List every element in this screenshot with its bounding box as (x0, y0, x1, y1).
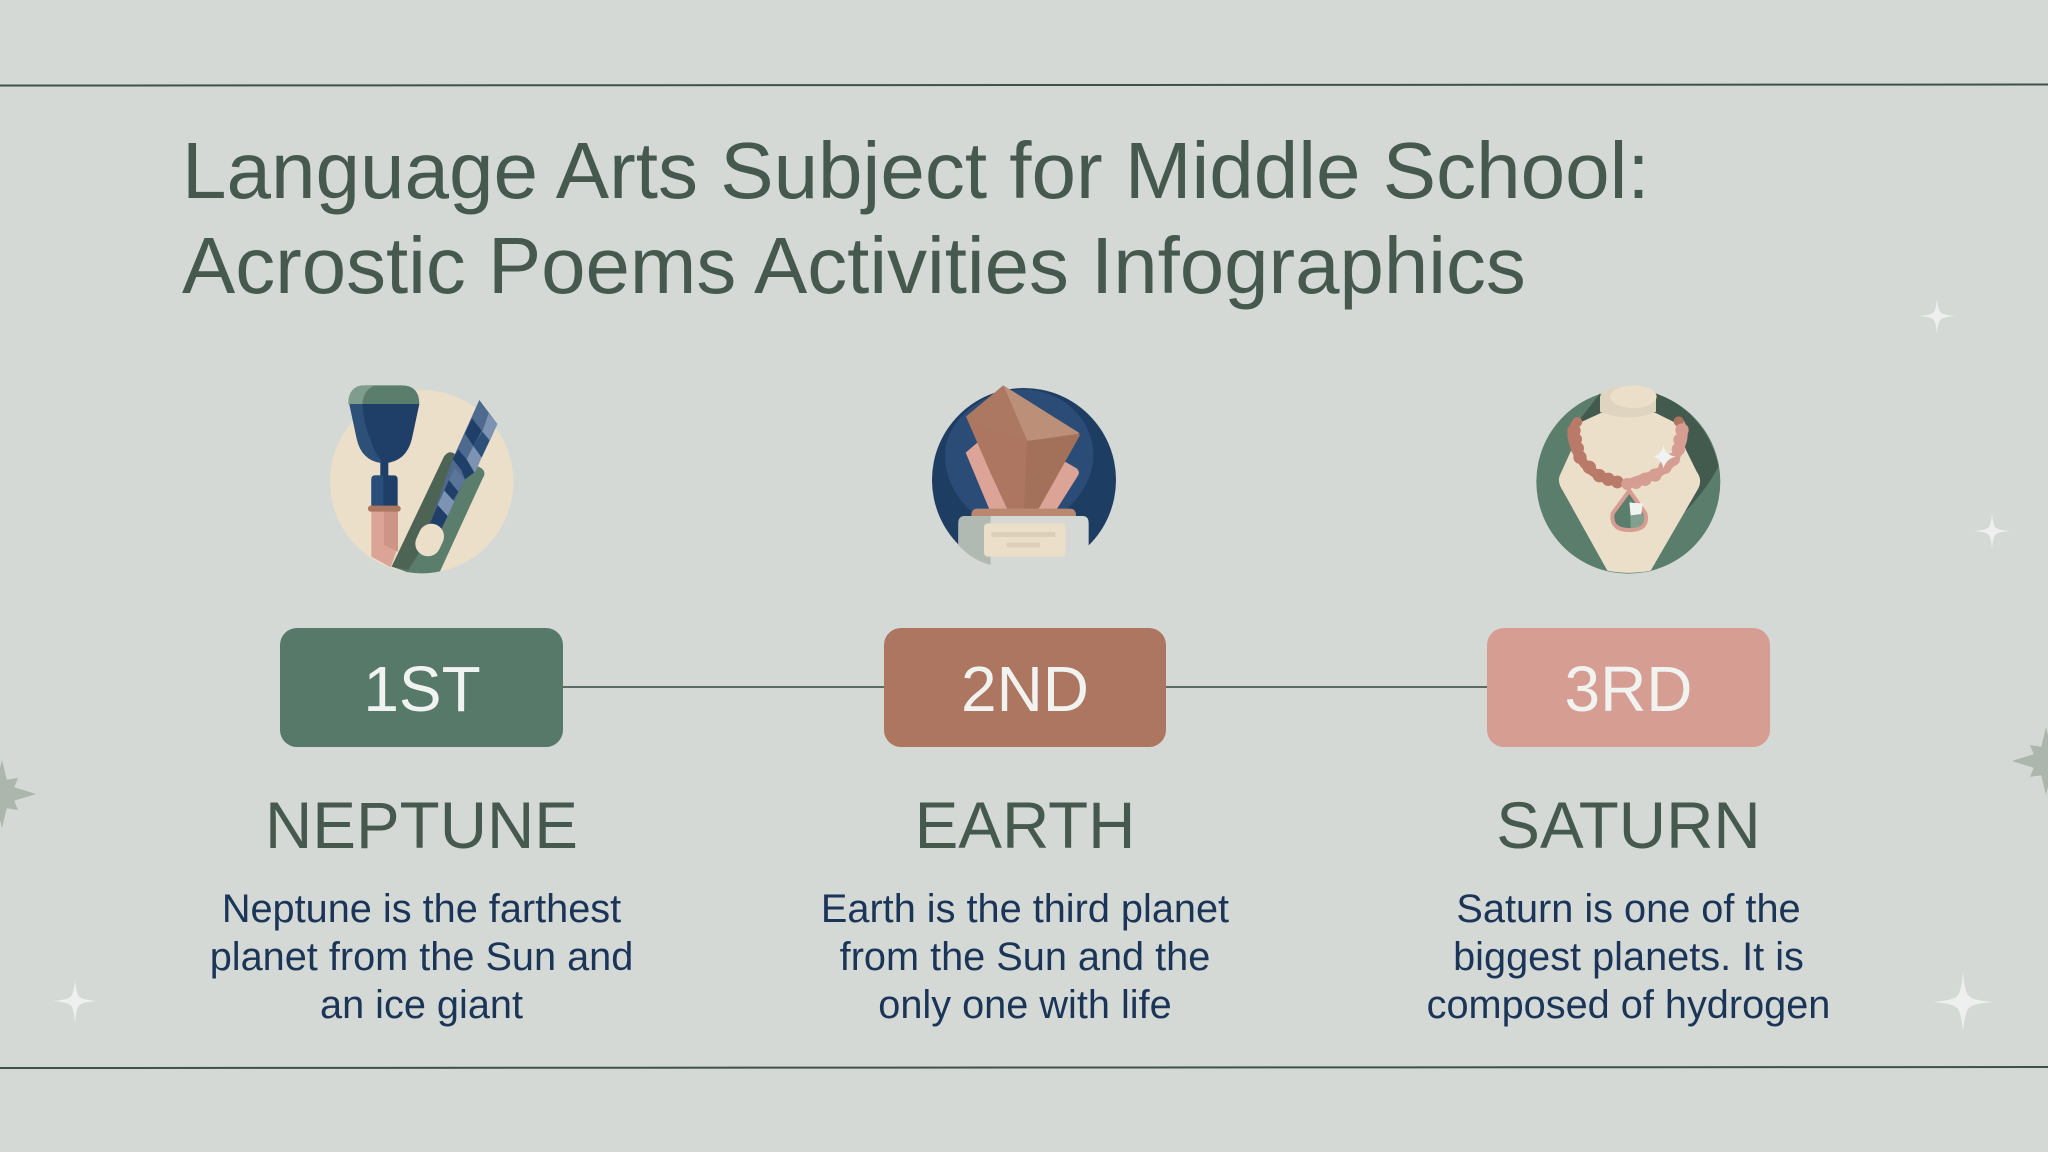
badge: 2ND: 2ND (961, 653, 1089, 725)
badge: 1ST: 1ST (363, 653, 481, 725)
knife hole (411, 520, 448, 560)
necklace beads right (1621, 416, 1689, 490)
badge: 3RD (1487, 628, 1770, 747)
decorative star: white upper right (1919, 298, 1955, 334)
decorative star: right dark (2012, 727, 2048, 795)
knife body (392, 453, 484, 573)
text: Saturn description: biggest planets. It is (1453, 935, 1804, 979)
cup stem (380, 462, 388, 477)
heading: Saturn: SATURN (1496, 789, 1761, 862)
main crystal (966, 385, 1080, 509)
text: Saturn description: composed of hydrogen (1427, 983, 1830, 1027)
plaque (984, 523, 1065, 557)
connector lines between badges (562, 686, 1488, 688)
title: Language Arts Subject for Middle School: (182, 126, 1650, 215)
pink rear crystals (966, 443, 1010, 509)
text: Neptune description: planet from the Sun and (210, 935, 633, 979)
text: Saturn description (1427, 887, 1830, 1027)
column: Saturn (1427, 789, 1830, 1027)
badge: 2ND (884, 628, 1166, 747)
sparkles (1653, 445, 1676, 468)
knife blade (430, 400, 497, 528)
title: Acrostic Poems Activities Infographics (182, 221, 1526, 310)
column: Neptune (210, 789, 633, 1027)
cup bowl (349, 404, 419, 463)
decorative star: white lower left (53, 979, 97, 1023)
column: Earth (821, 789, 1229, 1027)
decorative star: white mid right (1974, 513, 2010, 549)
text: Earth description: from the Sun and the (840, 935, 1210, 979)
decorative star: white lower right (1933, 972, 1993, 1032)
icon: crystal on plinth (932, 385, 1116, 580)
text: Earth description (821, 887, 1229, 1027)
cup rim (348, 385, 419, 404)
bust (1559, 413, 1700, 573)
plinth (958, 516, 1089, 580)
text: Neptune description: an ice giant (320, 983, 523, 1027)
badge: 1ST (280, 628, 563, 747)
badge: 3RD: 3RD (1564, 653, 1693, 725)
text: Saturn description: Saturn is one of the (1456, 887, 1801, 931)
cup handle (371, 510, 398, 567)
text: Earth description: only one with life (878, 983, 1172, 1027)
heading: Neptune: NEPTUNE (265, 789, 578, 862)
plinth top (971, 509, 1076, 516)
text: Earth description: Earth is the third planet (821, 887, 1229, 931)
decorative star: left dark (0, 760, 36, 828)
icon: cup and craft knife (330, 385, 513, 573)
text: Neptune description (210, 887, 633, 1027)
neck (1600, 386, 1656, 417)
pendant (1612, 491, 1646, 530)
icon: necklace on bust (1536, 385, 1720, 574)
necklace beads left (1567, 417, 1624, 488)
text: Neptune description: Neptune is the farthest (222, 887, 621, 931)
heading: Earth: EARTH (915, 789, 1135, 862)
title (182, 126, 1650, 310)
